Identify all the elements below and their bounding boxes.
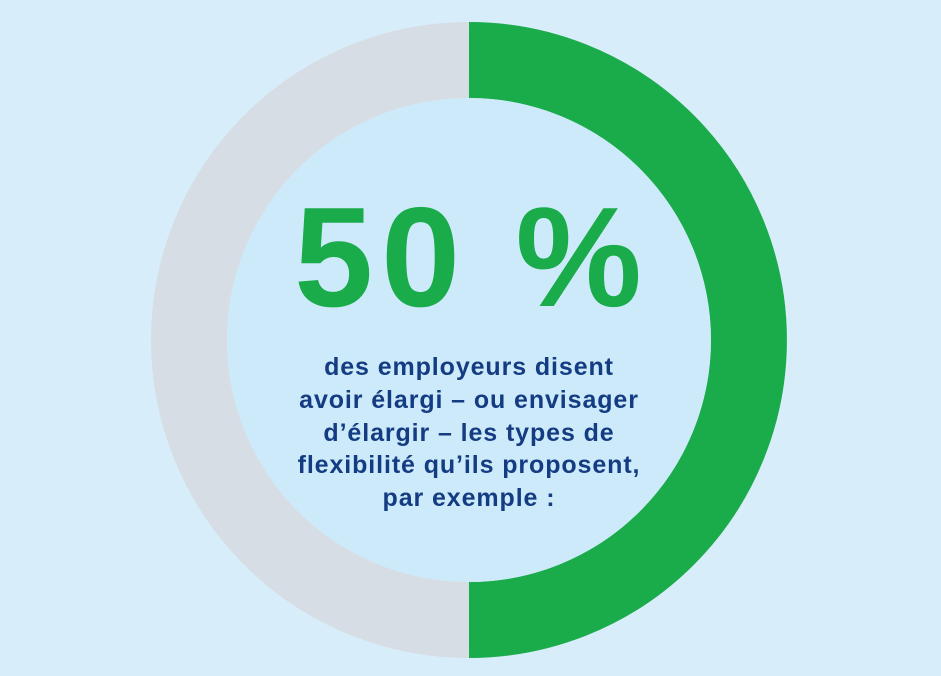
big percentage: 50 % — [294, 178, 650, 337]
description text: d’élargir – les types de — [323, 419, 615, 447]
description text: des employeurs disent — [324, 353, 614, 381]
description text: avoir élargi – ou envisager — [299, 386, 639, 414]
ring: grey remainder — [189, 60, 749, 620]
inner circle — [227, 98, 711, 582]
description text: flexibilité qu’ils proposent, — [298, 451, 640, 479]
description text — [298, 353, 640, 512]
ring: green 50% — [469, 60, 749, 620]
description text: par exemple : — [383, 484, 555, 512]
